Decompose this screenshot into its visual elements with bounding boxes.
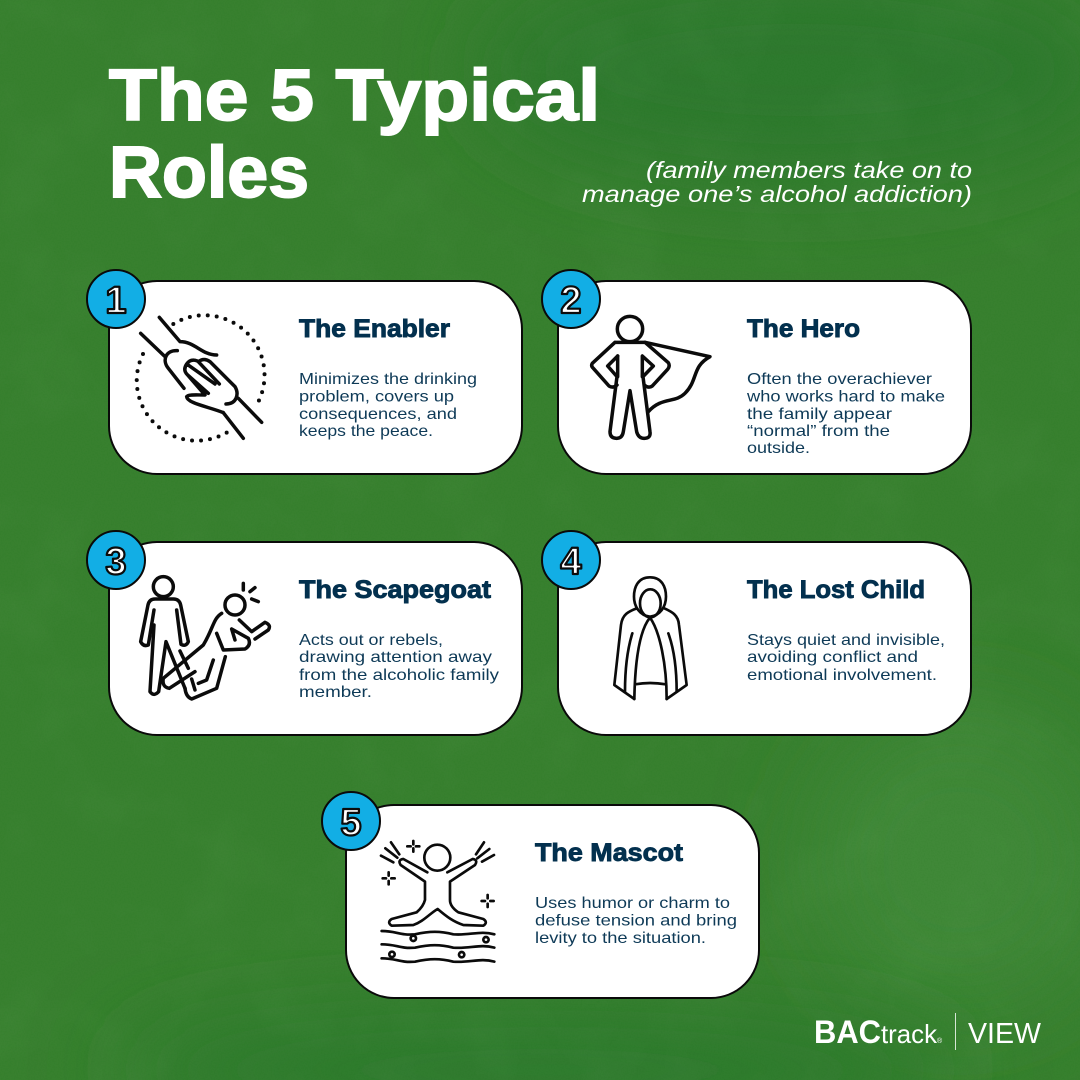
description bbox=[747, 632, 945, 684]
description bbox=[299, 632, 499, 701]
badge 4: 4 bbox=[560, 541, 582, 583]
title: Roles bbox=[109, 133, 309, 213]
description: Stays quiet and invisible, bbox=[747, 632, 945, 649]
subtitle bbox=[582, 157, 972, 207]
description: keeps the peace. bbox=[299, 423, 433, 440]
icon: two hands reaching bbox=[137, 315, 265, 441]
heading: The Scapegoat bbox=[299, 576, 492, 604]
description: emotional involvement. bbox=[747, 667, 937, 684]
badge 1: 1 bbox=[105, 280, 127, 322]
logo: BACtrack VIEW: VIEW bbox=[968, 1018, 1042, 1050]
heading: The Mascot bbox=[535, 839, 684, 867]
description: member. bbox=[299, 684, 372, 701]
badge 2 bbox=[542, 270, 600, 328]
description: drawing attention away bbox=[299, 649, 492, 666]
panel: the lost child bbox=[542, 531, 971, 735]
description: avoiding conflict and bbox=[747, 649, 918, 666]
heading: The Lost Child bbox=[747, 576, 925, 604]
title bbox=[109, 56, 600, 213]
subtitle: (family members take on to bbox=[646, 157, 972, 183]
description: outside. bbox=[747, 440, 810, 457]
icon: hooded cloak bbox=[614, 577, 687, 699]
icon: caped hero bbox=[592, 316, 710, 438]
description: consequences, and bbox=[299, 406, 457, 423]
subtitle: manage one’s alcohol addiction) bbox=[582, 181, 972, 207]
description bbox=[746, 371, 945, 457]
description: Uses humor or charm to bbox=[535, 895, 730, 912]
icon: person tripping another bbox=[141, 577, 269, 699]
title: The 5 Typical bbox=[109, 56, 600, 136]
heading: The Hero bbox=[747, 315, 860, 343]
badge 3: 3 bbox=[105, 541, 127, 583]
badge 4 bbox=[542, 531, 600, 589]
description: Often the overachiever bbox=[747, 371, 932, 388]
badge 5 bbox=[322, 792, 380, 850]
description: “normal” from the bbox=[747, 423, 890, 440]
description: levity to the situation. bbox=[535, 930, 706, 947]
description: the family appear bbox=[747, 406, 892, 423]
badge 3 bbox=[87, 531, 145, 589]
icon: jumping figure over water bbox=[381, 841, 494, 962]
logo: BACtrack VIEW bbox=[814, 1013, 1042, 1050]
description: from the alcoholic family bbox=[299, 667, 499, 684]
description: Minimizes the drinking bbox=[299, 371, 477, 388]
description bbox=[299, 371, 477, 440]
badge 2: 2 bbox=[560, 280, 582, 322]
logo: BACtrack VIEW: BAC bbox=[814, 1014, 881, 1050]
description: who works hard to make bbox=[746, 388, 945, 406]
panel: the hero bbox=[542, 270, 971, 474]
panel: the mascot bbox=[322, 792, 759, 998]
heading: The Enabler bbox=[299, 315, 450, 343]
logo: BACtrack VIEW: ® bbox=[937, 1037, 943, 1045]
description bbox=[535, 895, 737, 947]
logo: BACtrack VIEW: track bbox=[881, 1019, 938, 1049]
description: Acts out or rebels, bbox=[299, 632, 443, 649]
description: defuse tension and bring bbox=[535, 912, 737, 930]
badge 1 bbox=[87, 270, 145, 328]
panel: the scapegoat bbox=[87, 531, 522, 735]
panel: the enabler bbox=[87, 270, 522, 474]
description: problem, covers up bbox=[299, 388, 454, 406]
badge 5: 5 bbox=[340, 802, 362, 844]
